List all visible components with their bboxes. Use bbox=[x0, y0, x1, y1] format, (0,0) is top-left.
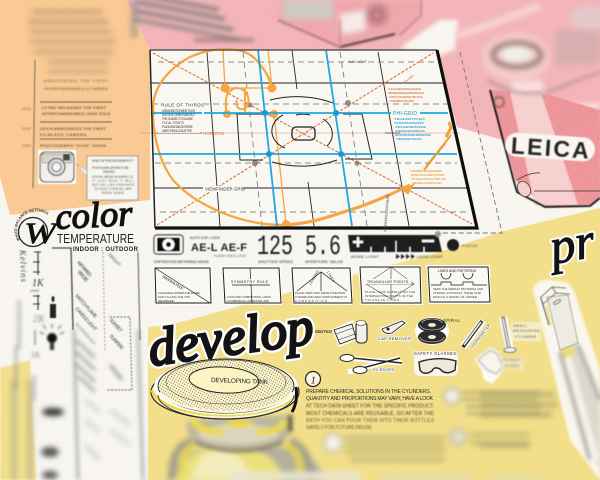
chart lower, blurred bbox=[29, 314, 97, 360]
thermometer: THERMOMETER bbox=[470, 323, 491, 350]
tank lid bbox=[151, 359, 299, 419]
viewfinder frame bbox=[150, 50, 477, 228]
panel: pink camera background bbox=[127, 0, 600, 197]
cylinder: SMALL bbox=[513, 324, 527, 328]
heading: color temperature: TEMPERATURE bbox=[57, 232, 134, 246]
safety glasses: SAFETY GLASSES bbox=[414, 351, 456, 356]
golden spiral note: RATIO IS FOCUSED ON POINT bbox=[411, 173, 445, 177]
rule of thirds note: PLACE A DETAIL ON THESE bbox=[162, 125, 193, 129]
label: metering: EXPOSITION METERING MODE bbox=[154, 260, 209, 264]
safety glasses bbox=[414, 351, 458, 376]
rubber gloves bbox=[477, 349, 523, 382]
equipment stickers bbox=[315, 317, 541, 376]
heading: print: pr bbox=[542, 212, 599, 275]
icon: instagram camera bbox=[38, 150, 76, 184]
chart lower, blurred: INCANDESCENT bbox=[74, 322, 97, 346]
aperture value: 5.6 bbox=[305, 232, 341, 263]
rotated corner label: AF BOUNDS & EXPOSURE bbox=[383, 193, 390, 232]
card: symmetry rule: LOOK AND COMPOSITION, USING bbox=[227, 295, 271, 299]
phi grid note: THE LINE GRID THAT WANT bbox=[394, 117, 425, 121]
card: triangular points bbox=[358, 265, 423, 305]
color temperature chart: STROBE bbox=[76, 269, 90, 284]
golden spiral note: THE SPIRAL WITH A GOLDEN bbox=[410, 169, 442, 173]
phi grid note: THE GOLDEN SECTION RULE bbox=[395, 125, 426, 129]
callout: end of photography: END OF PHOTOGRAPHY? bbox=[92, 158, 135, 163]
rule of thirds note: LINES THEN LOOK AT THE bbox=[162, 129, 192, 133]
card: lines and patterns: LINES AND PATTERNS bbox=[438, 269, 477, 273]
shutter speed: 125 bbox=[257, 232, 293, 263]
thermometer bbox=[463, 321, 491, 350]
card: leading lines: TOWARD AND AWAY FROM SUBJECT IN bbox=[295, 295, 347, 299]
aperture value: APERTURE VALUE bbox=[305, 259, 343, 264]
exposure locks: AUTO EXP. LOCK bbox=[190, 236, 221, 240]
chart lower, blurred: 3K bbox=[29, 350, 42, 360]
bottom strip, blurred bbox=[230, 472, 540, 480]
panel: yellow develop background bbox=[148, 208, 600, 480]
spiral: SPIRAL bbox=[443, 318, 461, 323]
history timeline: INTERCHANGEABLE A CAMERA bbox=[44, 86, 108, 91]
history timeline: LEICA ANNOUNCES THE FIRST bbox=[40, 126, 107, 131]
color temperature chart bbox=[18, 248, 140, 390]
history timeline: INTERCHANGEABLE LENS ZOLA bbox=[42, 111, 110, 116]
card: diagonal rule: SHOT ALONG THE TOP bbox=[158, 295, 190, 299]
viewfinder outer dashed border bbox=[438, 52, 502, 233]
golden triangle note: DIVIDES FRAME SQUARE WITH ONE bbox=[388, 91, 424, 95]
card: lines and patterns: DESIGN A SENSE OF ORDER bbox=[433, 295, 477, 299]
step 1 bbox=[306, 372, 435, 431]
blue phi grid bbox=[153, 50, 457, 226]
prism edges bbox=[278, 0, 421, 47]
viewfinder grid lines bbox=[151, 50, 468, 227]
developing tank bbox=[151, 359, 323, 480]
scissors: SCISSORS bbox=[373, 367, 394, 372]
step 1 text bbox=[306, 389, 435, 431]
focus indicator: FOCUS bbox=[462, 243, 477, 248]
steps 2-4, blurred bbox=[444, 388, 540, 415]
history timeline: PHOTOGRAPH "ICON" SHOW bbox=[40, 143, 106, 148]
history timeline bbox=[22, 60, 112, 188]
step 1 text: AT TECH DATA SHEET FOR THE SPECIFIC PRODUCT. bbox=[306, 404, 434, 410]
heading: develop: develop bbox=[144, 297, 317, 378]
callout: end of photography: PRACTICE bbox=[103, 170, 115, 174]
history timeline: 2015 bbox=[22, 126, 32, 131]
rule of thirds note: SHOT INTO 3 PARTS AND PUT bbox=[162, 113, 195, 117]
white balance logo: WHITE BALANCE SETTINGS bbox=[14, 208, 48, 242]
less light label bbox=[396, 254, 444, 259]
history timeline: 2020 bbox=[22, 143, 32, 148]
phi grid note bbox=[391, 110, 431, 141]
phi grid note: THIRDS FEEL STRONG bbox=[396, 137, 423, 141]
viewfinder dashed thirds bbox=[153, 52, 470, 226]
phi grid note: TO HAVE THIS, SO IT DOESN'T bbox=[394, 121, 424, 125]
top pink blurred text block bbox=[130, 0, 254, 42]
viewfinder bbox=[140, 49, 477, 232]
golden spiral note: GOLDEN SPIRAL bbox=[425, 142, 448, 167]
card: leading lines: COMPOSITION bbox=[295, 299, 327, 303]
step 1 text: BATH YOU CAN POUR THEM INTO THEIR BOTTLES bbox=[306, 418, 435, 424]
tank neck, blurred bbox=[187, 415, 293, 452]
card: lines and patterns bbox=[426, 265, 491, 304]
color temperature chart: NIGHT bbox=[107, 252, 122, 268]
golden triangle note: GOLDEN bbox=[402, 74, 415, 85]
callout: end of photography: PHOTOS ARE GROWN TO BE bbox=[92, 166, 129, 170]
golden triangle diagonals bbox=[153, 53, 472, 225]
callout: end of photography: TO RULE THEM ALL ANY bbox=[94, 187, 133, 191]
rule of thirds note: USE A GRID TO DIVIDE YOUR bbox=[162, 109, 196, 113]
scissors bbox=[340, 354, 402, 374]
card: diagonal rule bbox=[153, 266, 213, 305]
status readout row bbox=[154, 231, 477, 264]
composition rule cards bbox=[153, 265, 491, 305]
camera: leica body bbox=[488, 72, 600, 207]
color temperature chart: MATCH FLAME bbox=[74, 293, 98, 320]
phi grid note: SHAPES WORK FOR ANY SO bbox=[395, 129, 426, 133]
label: developing tank: DEVELOPING TANK bbox=[211, 377, 269, 386]
cylinder: CYLINDER bbox=[515, 335, 536, 339]
golden spiral note: IT'S THE LOGICAL POINT THE bbox=[411, 177, 446, 181]
cylinder: MEASURING bbox=[513, 329, 540, 333]
card: leading lines: LINES bbox=[326, 270, 336, 284]
card: triangular points: INTERSECTING POINTS OF THE bbox=[365, 294, 413, 298]
tank body, blurred bbox=[167, 440, 323, 480]
dashed grid nodes bbox=[248, 100, 360, 166]
white balance logo bbox=[14, 208, 60, 250]
phi grid note: PROPORTIONATELY RATHER THAN bbox=[395, 133, 431, 137]
card: diagonal rule: DIAGONAL RULE bbox=[161, 274, 184, 291]
golden triangle note bbox=[388, 74, 424, 103]
exposure locks: FLASH HOLD LOCK bbox=[214, 254, 247, 258]
icon: metering mode bbox=[154, 235, 183, 254]
step 1 text: MOST CHEMICALS ARE REUSABLE, SO AFTER THE bbox=[306, 411, 435, 417]
step 1 text: PREPARE CHEMICAL SOLUTIONS IN THE CYLINDERS. bbox=[306, 389, 431, 395]
film bbox=[315, 320, 367, 345]
card: symmetry rule bbox=[221, 266, 282, 305]
card: triangular points: PLACE YOUR SUBJECT ON THE bbox=[365, 290, 415, 294]
less light label: LESS LIGHT bbox=[417, 254, 444, 259]
chart bottom, heavily blurred bbox=[14, 380, 130, 480]
color temperature chart: SUNSET bbox=[108, 317, 123, 334]
panel: orange history background bbox=[0, 0, 150, 215]
history timeline: 2013 bbox=[22, 106, 32, 111]
top pink blurred camera prism bbox=[278, 0, 421, 47]
exposure meter bar bbox=[348, 231, 442, 252]
color temperature chart: 1K bbox=[32, 278, 45, 289]
card: leading lines bbox=[290, 266, 353, 305]
golden triangle note: POINT ON INTERSECTING THE bbox=[389, 95, 423, 99]
icon: bulb bbox=[40, 324, 64, 350]
shutter speed: SHUTTER SPEED bbox=[258, 259, 293, 264]
enlarger / print tool bbox=[533, 280, 600, 480]
card: symmetry rule: SYMMETRY RULE bbox=[231, 280, 269, 284]
card: diagonal rule: A DIAGONAL DIVIDES THE FRAME bbox=[158, 291, 200, 295]
rubber gloves: GLOVES bbox=[504, 364, 519, 368]
color temperature chart: Kelvins bbox=[18, 249, 29, 283]
more light label: MORE LIGHT bbox=[351, 254, 380, 259]
exposure locks: AE-L AE-F bbox=[191, 242, 247, 254]
white patch by viewfinder corner bbox=[400, 20, 458, 56]
callout: end of photography bbox=[76, 156, 138, 200]
spiral bbox=[415, 317, 461, 345]
callout: end of photography: NOT BE LIKE PERHAPS bbox=[92, 183, 134, 187]
color temperature chart: SUNRISE bbox=[108, 333, 125, 352]
rule of thirds note: THE SUBJECT ON A LINE bbox=[162, 117, 193, 121]
card: leading lines: LEADING bbox=[308, 269, 320, 286]
color temperature chart: INFRARED bbox=[76, 260, 93, 279]
focus indicator bbox=[447, 239, 477, 251]
callout: end of photography: IT JUST REAL IT WILL bbox=[92, 179, 134, 183]
film: B&W FILM bbox=[315, 329, 332, 334]
heading: color temperature: INDOOR : OUTDOOR bbox=[73, 247, 139, 253]
golden triangle note: OTHER DIAGONAL LINES bbox=[389, 99, 414, 103]
rule of thirds note: FOCAL POINTS bbox=[162, 121, 184, 125]
step 1 text: QUANTITY AND PROPORTIONS MAY VARY, HAVE A LOOK bbox=[306, 396, 434, 402]
camera logo: LEICA: LEICA bbox=[510, 132, 590, 164]
card: symmetry rule: SYMMETRICAL HORIZONTAL AND bbox=[227, 299, 269, 303]
rubber gloves: RUBBER bbox=[503, 358, 521, 362]
card: triangular points: TRIANGLE LINES bbox=[365, 298, 399, 302]
color temperature chart: CANDLE LIGHT bbox=[74, 306, 98, 333]
card: triangular points: TRIANGULAR POINTS bbox=[367, 280, 409, 284]
rule of thirds note: RULE OF THIRDS bbox=[161, 102, 204, 108]
chart lower, blurred: 2K bbox=[33, 314, 46, 325]
phi grid note: PHI-GRID bbox=[393, 111, 417, 117]
history timeline: ANNOUNCES THE FIRST bbox=[44, 78, 109, 83]
card: lines and patterns: STRONG CONTRAST, THESE GIVE bbox=[433, 291, 481, 295]
viewfinder grid label: VIEWFINDER GRID bbox=[205, 186, 245, 192]
cap remover bbox=[378, 321, 411, 341]
white balance logo: W bbox=[24, 217, 60, 250]
card: leading lines: PLACE LINES THAT DRAW ATTENTION bbox=[295, 291, 345, 295]
step 1 text: SAFELY FOR FUTURE REUSE bbox=[306, 425, 373, 431]
rule of thirds note bbox=[158, 102, 204, 133]
card: diagonal rule: DIAGONAL LINE bbox=[158, 299, 174, 303]
heading: develop: develop bbox=[144, 297, 317, 378]
shutter speed bbox=[257, 232, 293, 264]
callout: end of photography: MORE YEARS bbox=[102, 191, 124, 195]
card: lines and patterns: SEEK THE REPEAT PATTERNS AND bbox=[433, 287, 483, 291]
callout: end of photography: SOCIAL MEDIA SHARING, IS bbox=[92, 175, 133, 179]
step number 1: 1 bbox=[310, 374, 316, 386]
heading: color temperature bbox=[14, 193, 139, 253]
golden spiral bbox=[150, 49, 414, 228]
exposure locks bbox=[190, 236, 247, 258]
history timeline: FILMLESS CAMERA bbox=[40, 132, 86, 137]
history text top, blurred bbox=[28, 10, 116, 73]
phi grid nodes bbox=[262, 110, 344, 157]
heading: print: pr bbox=[542, 212, 599, 275]
cylinder bbox=[503, 317, 541, 352]
heading: color temperature: color bbox=[54, 193, 134, 237]
golden spiral note bbox=[410, 122, 451, 185]
icon: candle bbox=[50, 296, 56, 318]
panel: left yellow strip bbox=[0, 360, 36, 480]
horizon line: HORIZON bbox=[203, 131, 224, 136]
camera outline in viewfinder bbox=[237, 97, 372, 166]
golden spiral note: NATURAL LOOKS FULL SET bbox=[412, 181, 442, 185]
golden triangle note: THE GOLDEN TRIANGLE RULE bbox=[388, 87, 421, 91]
aux light label: AUX LIGHT bbox=[348, 60, 368, 64]
color temperature chart: 1000K bbox=[30, 289, 40, 293]
history timeline: LYTRO RELEASES THE FIRST bbox=[42, 105, 107, 110]
camera: leica, blurred top bbox=[458, 6, 600, 150]
cap remover: CAP REMOVER bbox=[378, 336, 411, 341]
